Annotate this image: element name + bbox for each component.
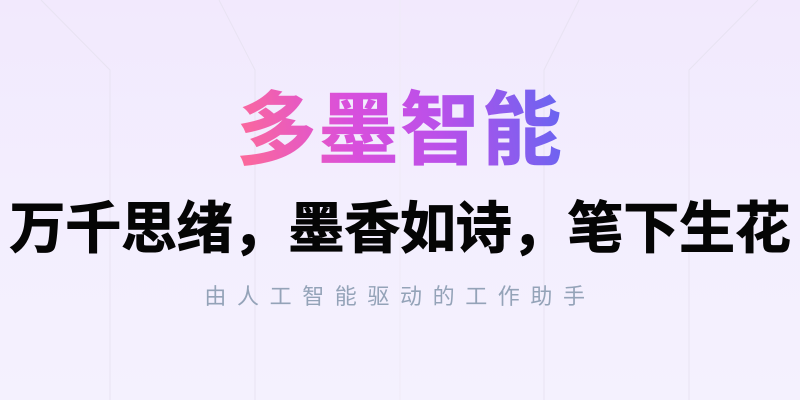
- tagline: 由人工智能驱动的工作助手: [204, 284, 596, 309]
- slogan: 万千思绪，墨香如诗，笔下生花: [9, 197, 791, 260]
- title: 多墨智能: [236, 86, 564, 175]
